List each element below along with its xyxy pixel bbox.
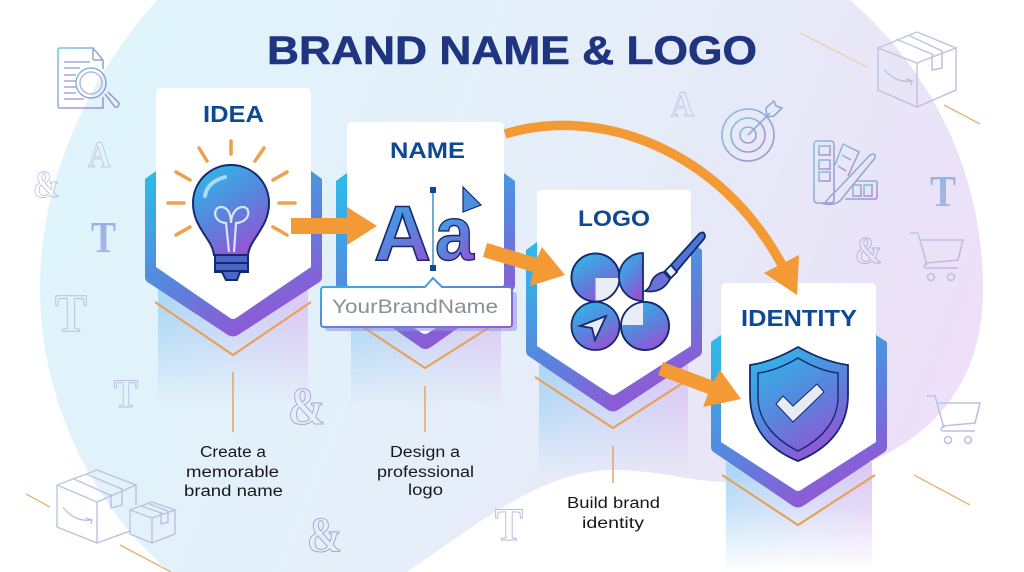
glow xyxy=(351,328,501,393)
icon: colour palette and brush xyxy=(814,141,877,204)
caption: Create a xyxy=(200,444,266,461)
letter T: T xyxy=(495,499,523,551)
white card xyxy=(721,283,876,491)
connector xyxy=(424,386,426,432)
white card xyxy=(156,88,311,319)
icon: target xyxy=(722,101,782,161)
letter T filled: T xyxy=(930,167,956,216)
ampersand: & xyxy=(307,506,342,562)
caption xyxy=(377,444,474,499)
icon: logo shapes and brush xyxy=(572,232,705,350)
caption: logo xyxy=(408,482,443,499)
icon: shield with check xyxy=(750,347,848,461)
caption xyxy=(567,495,660,532)
white card xyxy=(537,190,691,395)
caption: brand name xyxy=(184,483,283,500)
hexagon badge xyxy=(336,173,515,349)
heading: IDEA xyxy=(203,101,264,127)
heading: IDENTITY xyxy=(741,305,857,331)
icon: Aa type: A xyxy=(374,189,431,277)
caption xyxy=(184,444,283,500)
chevron xyxy=(363,327,490,368)
hexagon badge xyxy=(145,171,322,336)
glow xyxy=(539,365,688,462)
letter T small: T xyxy=(114,371,138,416)
letter T outline: T xyxy=(55,283,87,343)
icon: Aa type: a xyxy=(435,192,475,277)
white card xyxy=(347,122,504,334)
arrow: name to logo xyxy=(483,243,565,286)
ampersand: & xyxy=(33,164,60,206)
chevron xyxy=(722,475,875,525)
glow xyxy=(726,462,872,572)
title: BRAND NAME & LOGO xyxy=(267,29,757,73)
caption: Design a xyxy=(390,444,460,461)
caption: Build brand xyxy=(567,495,660,512)
ampersand: & xyxy=(288,378,325,436)
hexagon badge xyxy=(526,242,702,412)
icon: shopping cart xyxy=(910,233,963,280)
heading: NAME xyxy=(390,138,465,163)
ampersand: & xyxy=(855,230,882,272)
caption: professional xyxy=(377,464,474,481)
panel: logo xyxy=(526,190,705,532)
icon: light bulb xyxy=(168,141,295,280)
icon: parcel box top right xyxy=(878,32,956,107)
heading: LOGO xyxy=(578,206,650,231)
connector xyxy=(612,446,614,483)
arrow: logo to identity xyxy=(658,362,741,407)
panel: name xyxy=(321,122,517,499)
icon: Aa type xyxy=(374,187,481,277)
caption: memorable xyxy=(186,464,279,481)
connector xyxy=(232,372,234,432)
letter A: A xyxy=(88,135,111,176)
chevron xyxy=(535,377,692,428)
letter A: A xyxy=(671,84,694,124)
caption: identity xyxy=(582,515,644,532)
panel: idea xyxy=(145,88,322,500)
brand name input box xyxy=(321,278,517,331)
icon: shopping cart xyxy=(927,396,980,444)
icon: document with magnifier xyxy=(58,48,119,108)
icon: parcel boxes bottom left xyxy=(57,470,175,543)
arrow: idea to name xyxy=(291,207,377,245)
brand name input box: YourBrandName xyxy=(332,296,498,318)
glow xyxy=(158,289,308,388)
hexagon badge xyxy=(711,335,887,508)
arrow: name to identity xyxy=(505,125,799,295)
panel: identity xyxy=(711,283,887,572)
letter T filled: T xyxy=(91,213,116,262)
chevron xyxy=(155,302,311,355)
